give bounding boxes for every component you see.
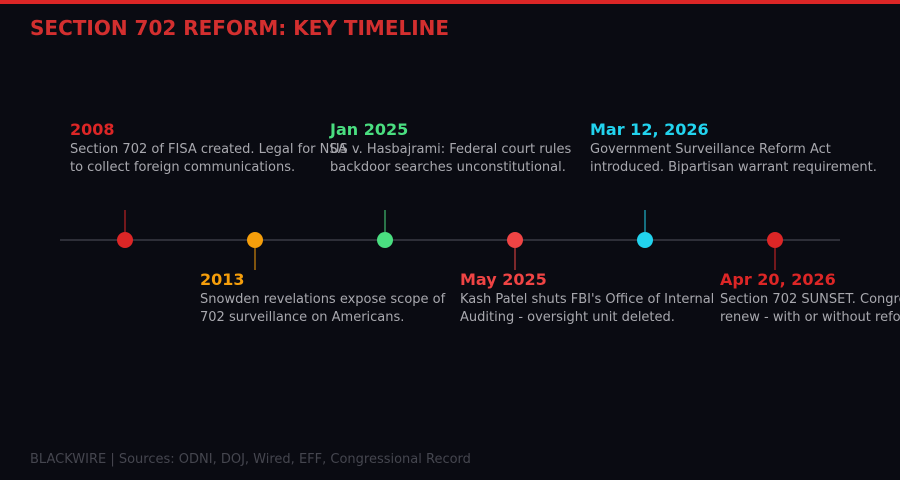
event: May 2025: Kash Patel shuts FBI's Office of Internal (460, 292, 714, 307)
event: 2008: 2008 (70, 120, 115, 139)
event: May 2025 (460, 232, 714, 325)
event: Jan 2025: US v. Hasbajrami: Federal court rules (330, 142, 571, 157)
event: 2008: Section 702 of FISA created. Legal for NSA (70, 142, 347, 157)
event: 2013: 702 surveillance on Americans. (200, 310, 404, 325)
event: Mar 12, 2026: Mar 12, 2026 (590, 120, 709, 139)
event: Jan 2025: backdoor searches unconstitutional. (330, 160, 566, 175)
event: 2013: Snowden revelations expose scope of (200, 292, 446, 307)
event: May 2025: May 2025 (460, 270, 547, 289)
event: Apr 20, 2026 (720, 232, 900, 325)
event: Apr 20, 2026: Apr 20, 2026 (720, 270, 836, 289)
event: 2008: to collect foreign communications. (70, 160, 295, 175)
event: 2013 (200, 232, 446, 325)
event: Jan 2025 (329, 120, 571, 248)
event: 2013: 2013 (200, 270, 245, 289)
event: Mar 12, 2026: introduced. Bipartisan warrant requirement. (590, 160, 877, 175)
event: Mar 12, 2026 (590, 120, 877, 248)
event: May 2025: Auditing - oversight unit deleted. (460, 310, 675, 325)
event: Mar 12, 2026: Government Surveillance Reform Act (590, 142, 831, 157)
title: SECTION 702 REFORM: KEY TIMELINE (30, 16, 449, 40)
event: 2008 (70, 120, 347, 248)
footer: BLACKWIRE | Sources: ODNI, DOJ, Wired, EFF, Congressional Record (30, 452, 471, 467)
event: Jan 2025: Jan 2025 (329, 120, 408, 139)
